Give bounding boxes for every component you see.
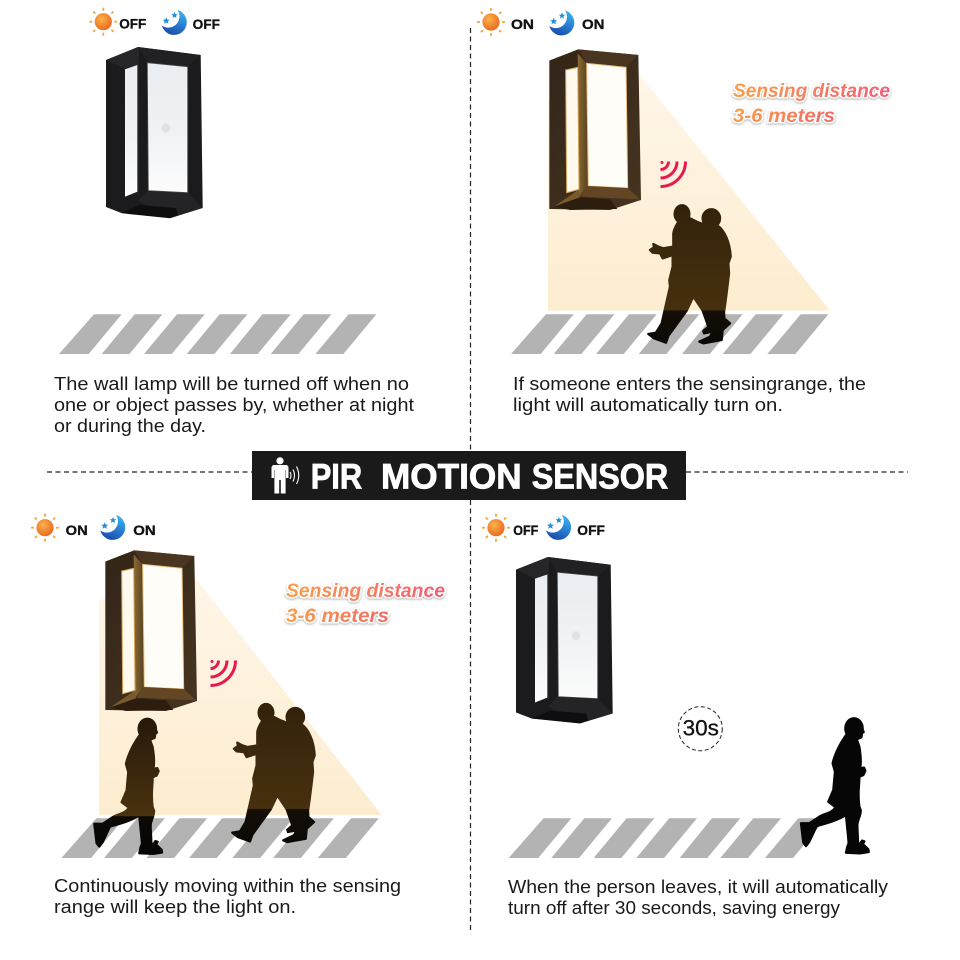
- crosswalk ground: [509, 818, 826, 858]
- caption: [54, 374, 414, 436]
- lit wall lamp: [549, 49, 641, 210]
- status icons: sun off, moon off: OFF: [119, 16, 146, 32]
- unlit wall lamp: [516, 557, 613, 724]
- title banner: SENSOR: [532, 457, 668, 496]
- caption: range will keep the light on.: [54, 897, 296, 917]
- crosswalk ground: [59, 314, 376, 354]
- caption: or during the day.: [54, 416, 206, 436]
- status icons: sun on, moon on: ON: [66, 523, 88, 538]
- panel: lamp off when nobody passes: [54, 9, 414, 436]
- two walking people silhouette: [232, 704, 315, 842]
- lit wall lamp: [105, 550, 197, 711]
- status icons: sun off, moon off: [90, 9, 220, 35]
- status icons: sun on, moon on: ON: [582, 17, 604, 32]
- caption: turn off after 30 seconds, saving energy: [508, 898, 840, 918]
- status icons: sun off, moon off: OFF: [577, 523, 605, 538]
- panel: light turns on when someone enters: [478, 9, 890, 415]
- light cone: [99, 580, 382, 815]
- status icons: sun off, moon off: [483, 514, 605, 541]
- title banner: MOTION: [381, 457, 522, 496]
- caption: one or object passes by, whether at night: [54, 395, 414, 415]
- caption: [513, 374, 866, 415]
- sensing distance label: [286, 581, 445, 627]
- runner silhouette: [801, 718, 869, 853]
- status icons: sun on, moon on: ON: [511, 17, 534, 32]
- 30 second timer: [678, 707, 722, 751]
- status icons: sun off, moon off: OFF: [193, 17, 220, 32]
- runner silhouette: [94, 719, 162, 854]
- sensing distance label: Sensing distance: [733, 81, 890, 102]
- two walking people silhouette: [648, 205, 731, 343]
- 30 second timer: 30s: [683, 716, 719, 740]
- unlit wall lamp: [106, 47, 203, 218]
- caption: When the person leaves, it will automatically: [508, 877, 888, 897]
- crosswalk ground: [511, 314, 828, 354]
- caption: light will automatically turn on.: [513, 395, 783, 415]
- caption: [508, 877, 888, 918]
- status icons: sun on, moon on: [32, 514, 156, 541]
- sensing waves icon: [210, 660, 236, 686]
- caption: [54, 876, 401, 917]
- crosswalk ground: [61, 818, 379, 858]
- panel: auto off after 30 seconds: [483, 514, 888, 918]
- sensing waves icon: [660, 161, 686, 186]
- sensing distance label: [733, 81, 890, 127]
- sensing distance label: 3-6 meters: [733, 106, 835, 127]
- caption: If someone enters the sensingrange, the: [513, 374, 866, 394]
- caption: The wall lamp will be turned off when no: [54, 374, 409, 394]
- title banner: [252, 451, 686, 500]
- status icons: sun on, moon on: ON: [133, 523, 156, 538]
- status icons: sun off, moon off: OFF: [513, 523, 538, 538]
- icon: person with motion waves: [272, 457, 299, 494]
- status icons: sun on, moon on: [478, 9, 604, 35]
- sensing distance label: 3-6 meters: [286, 606, 389, 627]
- sensing distance label: Sensing distance: [286, 581, 445, 602]
- light cone: [548, 75, 830, 311]
- caption: Continuously moving within the sensing: [54, 876, 401, 896]
- title banner: PIR: [311, 457, 362, 496]
- panel: continuous movement keeps light on: [32, 514, 445, 917]
